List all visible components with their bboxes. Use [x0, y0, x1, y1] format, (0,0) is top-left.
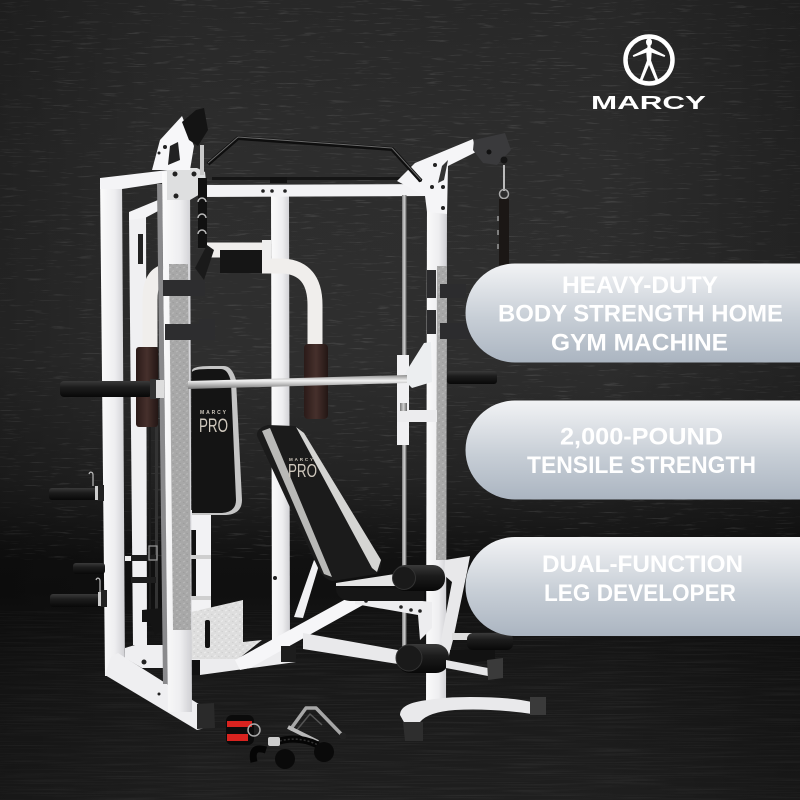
text: 2,000-pound: 2,000-POUND [560, 424, 723, 450]
rear left frame post [100, 178, 125, 676]
panel: tensile strength [466, 400, 800, 500]
left bar sleeve [60, 379, 164, 399]
right pulley [473, 133, 511, 165]
back pad support [191, 510, 211, 615]
logo: Marcy [591, 36, 707, 113]
arch frame [150, 250, 315, 347]
front guide rod [157, 184, 168, 684]
text: body strength home: BODY STRENGTH HOME [498, 300, 783, 328]
lat pull bar [208, 137, 421, 181]
incline bench pad [257, 425, 381, 581]
text: gym machine: GYM MACHINE [551, 330, 728, 356]
panel: heavy-duty body strength [466, 264, 800, 362]
black arm block [220, 250, 262, 273]
icon: circled human figure [626, 36, 672, 84]
bench base diagonal [235, 594, 372, 670]
base plate [191, 600, 262, 660]
incline bench pad: PRO [288, 461, 317, 481]
wordmark: MARCY [591, 92, 707, 113]
rear bottom platform [125, 645, 165, 668]
center upright post [271, 190, 290, 655]
right cable strap [498, 165, 509, 265]
right upright post [426, 194, 447, 706]
left top beam [100, 170, 168, 189]
pad logo: MARCY [289, 457, 313, 462]
stirrup handle [288, 708, 346, 742]
left gusset [152, 116, 194, 170]
bench floor rail [303, 633, 398, 664]
smith machine carriage [397, 342, 437, 445]
top plate [167, 168, 207, 200]
smith bar [188, 375, 407, 389]
left floor rail [105, 653, 205, 730]
front left main post [162, 172, 192, 712]
ankle strap [226, 715, 260, 745]
gym machine [49, 108, 546, 741]
tricep rope [253, 737, 334, 769]
text: tensile strength: TENSILE STRENGTH [527, 452, 756, 479]
pad logo: MARCY [200, 410, 227, 416]
rubber foot caps [197, 646, 546, 741]
inner left post [129, 207, 147, 645]
right base foot [400, 697, 532, 724]
bench support strut [294, 560, 319, 618]
right brackets [427, 270, 472, 339]
right barbell sleeve [447, 371, 497, 384]
text: leg developer: LEG DEVELOPER [544, 580, 736, 607]
text: heavy-duty: HEAVY-DUTY [562, 272, 718, 299]
left brackets [163, 280, 215, 340]
accessories [226, 708, 346, 769]
right gusset [397, 139, 476, 214]
top cross beam [200, 184, 427, 197]
rear floor rail [200, 650, 296, 675]
weight stack guide [125, 400, 162, 635]
guide rod [402, 195, 406, 647]
bench seat [336, 584, 424, 601]
text: dual-function: DUAL-FUNCTION [542, 551, 743, 578]
brown arm pads [136, 344, 328, 427]
left pulley [182, 108, 208, 146]
leg developer arm [441, 556, 470, 663]
leg rollers [392, 565, 513, 673]
back pad: PRO [199, 416, 228, 437]
back pad [192, 366, 242, 515]
left cable strap with handle [195, 145, 214, 280]
panel: leg developer [466, 537, 800, 636]
weight pegs [49, 472, 107, 607]
